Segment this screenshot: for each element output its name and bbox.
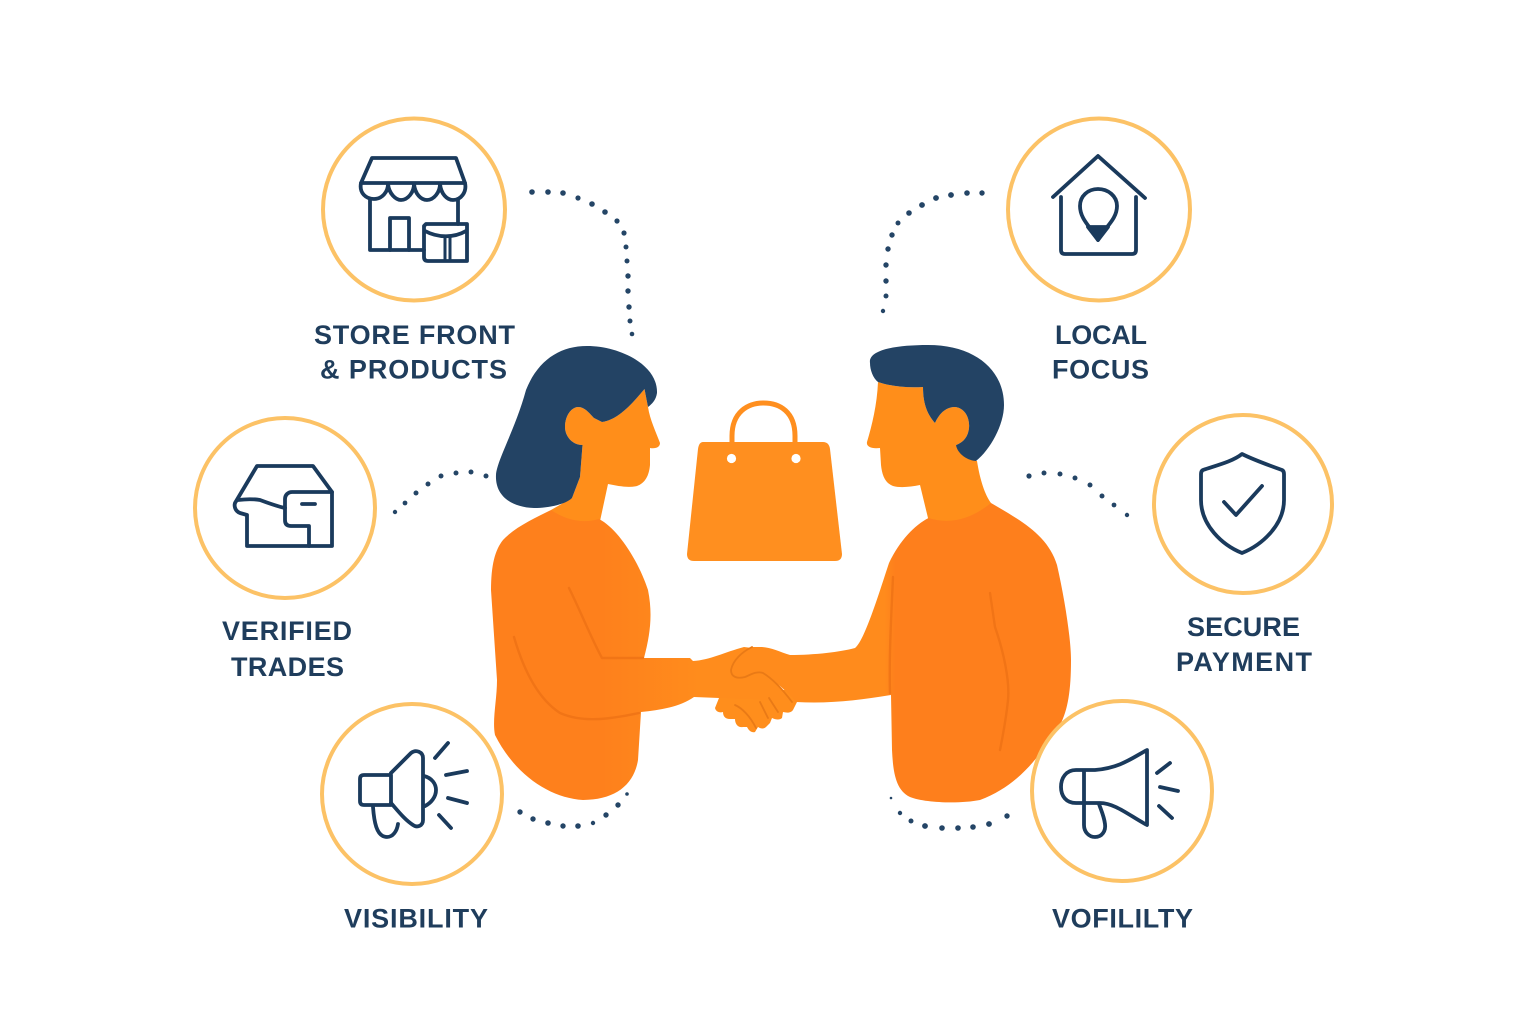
man torso and arm xyxy=(731,503,1071,802)
panel: verified trades xyxy=(195,418,375,682)
shopping bag xyxy=(687,403,842,561)
label: VISIBILITY xyxy=(344,904,488,934)
dotted connector: vofililty xyxy=(890,797,1010,831)
label lines xyxy=(1176,612,1312,677)
woman sleeve creases xyxy=(514,588,643,719)
man hair xyxy=(870,345,1004,461)
label lines xyxy=(1052,320,1149,384)
label lines: SECURE xyxy=(1187,612,1300,642)
man face and neck xyxy=(867,382,991,535)
person: man xyxy=(731,345,1071,802)
icon: package house xyxy=(235,466,332,546)
label lines: VERIFIED xyxy=(222,616,352,646)
label lines: TRADES xyxy=(231,652,344,682)
icon: house with location pin xyxy=(1053,156,1145,254)
label lines: LOCAL xyxy=(1055,320,1147,350)
woman fingers xyxy=(715,690,797,732)
panel: store front and products xyxy=(314,118,516,384)
ring xyxy=(322,704,502,884)
handshake creases xyxy=(731,647,792,728)
dotted connector: secure payment xyxy=(1026,470,1129,517)
label lines: & PRODUCTS xyxy=(320,354,507,384)
label lines xyxy=(222,616,352,682)
label lines xyxy=(314,320,516,384)
ring xyxy=(195,418,375,598)
icon: megaphone xyxy=(360,743,467,837)
dotted connector: store front xyxy=(529,189,634,336)
woman hair xyxy=(496,346,657,508)
woman face and neck xyxy=(551,389,660,535)
ring xyxy=(1008,118,1190,300)
ring xyxy=(1154,415,1332,593)
icon: bullhorn xyxy=(1061,750,1178,837)
panel: visibility xyxy=(322,704,502,934)
bag eyelets xyxy=(727,454,801,463)
icon: store with box xyxy=(361,158,467,261)
icon: shield with check xyxy=(1201,454,1284,553)
panel: local focus xyxy=(1008,118,1190,384)
panel: vofililty xyxy=(1032,701,1212,934)
label lines: PAYMENT xyxy=(1176,647,1312,677)
label lines: FOCUS xyxy=(1052,354,1149,384)
dotted connector: local focus xyxy=(881,190,985,313)
dotted connector: verified trades xyxy=(393,470,488,514)
bag body xyxy=(687,442,842,561)
label: VOFILILTY xyxy=(1052,904,1193,934)
bag handle xyxy=(732,403,795,443)
person: woman xyxy=(491,346,797,800)
ring xyxy=(323,118,505,300)
dotted connector: visibility xyxy=(517,792,629,829)
woman torso and arm xyxy=(491,510,790,800)
panel: secure payment xyxy=(1154,415,1332,677)
ring xyxy=(1032,701,1212,881)
man sleeve creases xyxy=(890,577,1008,750)
label lines: STORE FRONT xyxy=(314,320,516,350)
